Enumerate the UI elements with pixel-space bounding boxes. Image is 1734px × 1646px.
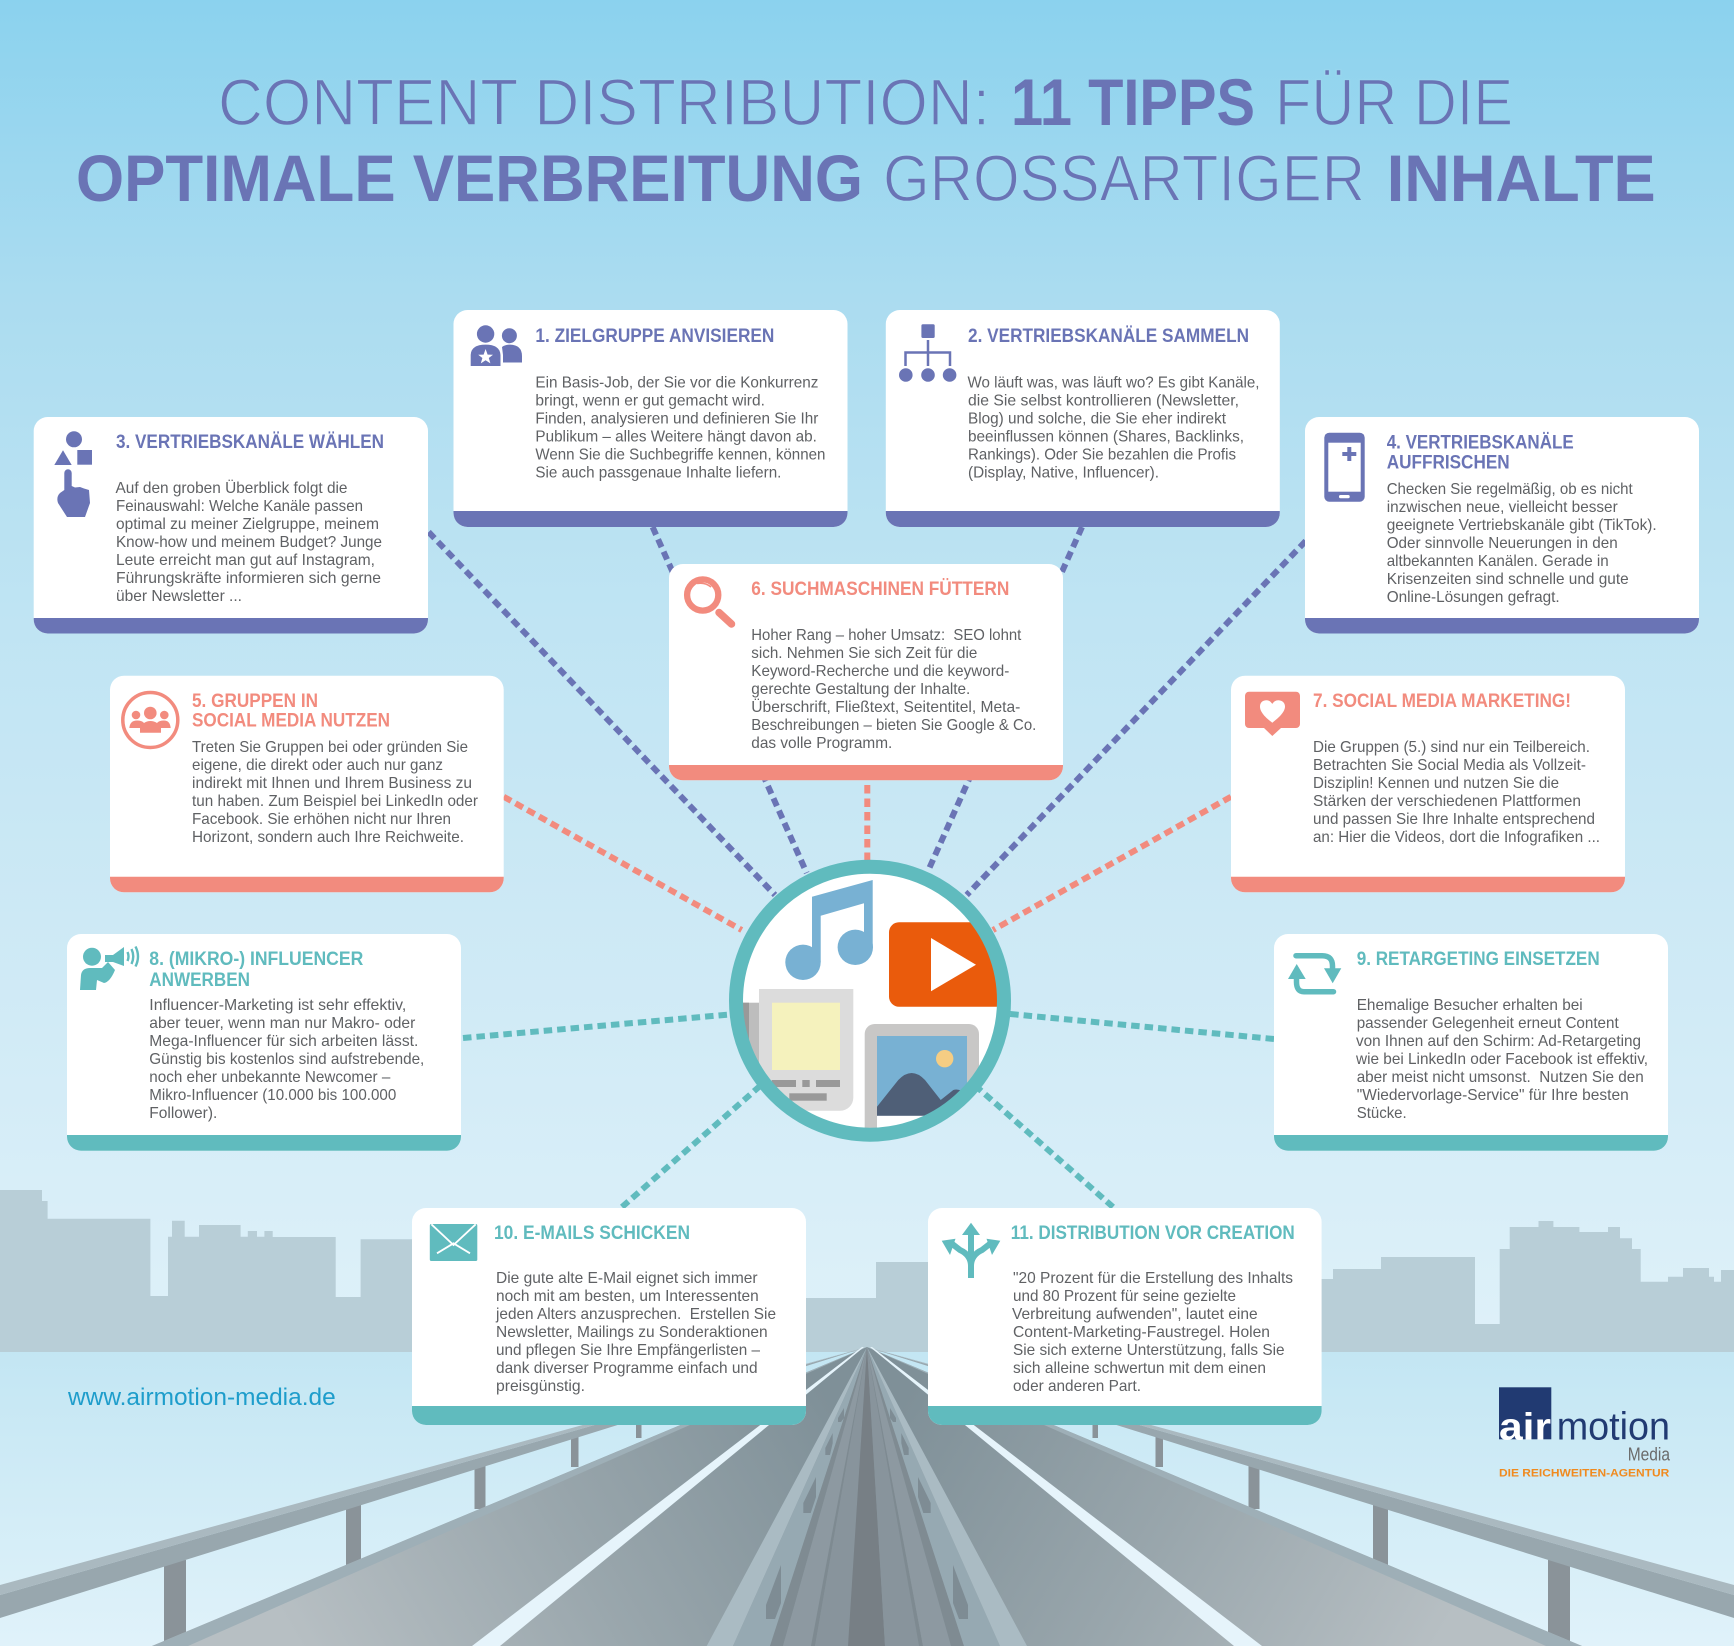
body text: die Sie selbst kontrollieren (Newsletter, [968, 392, 1239, 410]
right guard rail [867, 1347, 1734, 1646]
body text: inzwischen neue, vielleicht besser [1387, 499, 1618, 516]
heading: 8. (MIKRO-) INFLUENCER [149, 949, 364, 970]
body text: "Wiedervorlage-Service" für Ihre besten [1357, 1087, 1629, 1104]
body text: Führungskräfte informieren sich gerne [116, 570, 381, 587]
body text: jeden Alters anzusprechen. Erstellen Sie [495, 1306, 776, 1323]
body text: Disziplin! Kennen und nutzen Sie die [1313, 775, 1559, 792]
panel: tip 11 [928, 1208, 1322, 1425]
body text: Know-how und meinem Budget? Junge [116, 534, 382, 551]
body text: Die Gruppen (5.) sind nur ein Teilbereich. [1313, 739, 1590, 756]
body text: Follower). [149, 1105, 217, 1122]
body text: Facebook. Sie erhöhen nicht nur Ihren [192, 811, 451, 828]
icon: group in circle [123, 692, 178, 748]
body text: Auf den groben Überblick folgt die [116, 479, 348, 497]
icon: video play button [889, 922, 997, 1007]
central barrier [707, 1347, 1027, 1646]
heading: SOCIAL MEDIA NUTZEN [192, 710, 390, 732]
body text [192, 739, 479, 846]
icon: smartphone [1324, 433, 1365, 502]
title: OPTIMALE VERBREITUNG [76, 141, 863, 215]
icon: magnifier [687, 579, 732, 624]
dashed connectors [429, 527, 1306, 1207]
body text: eigene, die direkt oder auch nur ganz [192, 757, 443, 774]
heading: ANWERBEN [149, 970, 250, 991]
body text: Keyword-Recherche und die keyword- [751, 663, 1009, 680]
heading [1387, 432, 1574, 474]
panel: tip 10 [412, 1208, 806, 1425]
body text: Mega-Influencer für sich arbeiten lässt. [149, 1033, 418, 1050]
body text [968, 374, 1260, 482]
title: FÜR DIE [1275, 65, 1513, 139]
body text: Wenn Sie die Suchbegriffe kennen, können [535, 446, 825, 464]
body text: Influencer-Marketing ist sehr effektiv, [149, 997, 406, 1014]
body text: noch mit am besten, um Interessenten [496, 1288, 759, 1305]
body text: Publikum – alles Weitere hängt davon ab. [535, 428, 817, 446]
body text: und 80 Prozent für seine gezielte [1013, 1288, 1236, 1305]
background: water [0, 1352, 1734, 1646]
body text: beeinflussen können (Shares, Backlinks, [968, 428, 1244, 446]
body text: Sie sich externe Unterstützung, falls Sie [1013, 1342, 1285, 1359]
icon: shapes and hand [54, 431, 92, 517]
body text: Blog) und solche, die Sie eher indirekt [968, 410, 1227, 428]
body text: und pflegen Sie Ihre Empfängerlisten – [496, 1342, 760, 1359]
body text: (Display, Native, Influencer). [968, 464, 1159, 482]
body text: sich. Nehmen Sie sich Zeit für die [751, 645, 977, 662]
heading: AUFFRISCHEN [1387, 452, 1510, 474]
icon: three-way arrow [942, 1223, 1000, 1278]
body text [1387, 481, 1657, 606]
panel: tip 4 [1305, 417, 1699, 634]
icon: person with megaphone [80, 946, 138, 990]
body text: noch eher unbekannte Newcomer – [149, 1069, 390, 1086]
icon: envelope [430, 1224, 477, 1261]
body text: Krisenzeiten sind schnelle und gute [1387, 571, 1629, 588]
panel: tip 1 [454, 310, 848, 527]
title: 11 TIPPS [1011, 65, 1255, 139]
body text [1355, 997, 1648, 1122]
body text: sich alleine schwertun mit dem einen [1013, 1360, 1266, 1377]
body text: Ehemalige Besucher erhalten bei [1357, 997, 1583, 1014]
body text: gerechte Gestaltung der Inhalte. [751, 681, 970, 698]
title: GROSSARTIGER [883, 141, 1365, 215]
heading: 2. VERTRIEBSKANÄLE SAMMELN [968, 326, 1249, 347]
body text: preisgünstig. [496, 1378, 585, 1395]
heading [192, 691, 390, 732]
body text: aber meist nicht umsonst. Nutzen Sie den [1357, 1069, 1644, 1086]
body text: Stücke. [1357, 1105, 1407, 1122]
central circle: content types [735, 867, 1019, 1151]
body text: geeignete Vertriebskanäle gibt (TikTok). [1387, 517, 1657, 534]
icon: hierarchy [899, 324, 956, 382]
body text: Finden, analysieren und definieren Sie Ihr [535, 410, 819, 428]
heading: 9. RETARGETING EINSETZEN [1357, 949, 1600, 970]
body text [1012, 1270, 1293, 1395]
body text: indirekt mit Ihnen und Ihrem Business zu [192, 775, 472, 792]
body text: Rankings). Oder Sie bezahlen die Profis [968, 446, 1236, 464]
body text [495, 1270, 776, 1395]
body text: optimal zu meiner Zielgruppe, meinem [116, 516, 379, 533]
body text: Betrachten Sie Social Media als Vollzeit- [1313, 757, 1586, 774]
heading: 1. ZIELGRUPPE ANVISIEREN [535, 326, 774, 347]
body text: Leute erreicht man gut auf Instagram, [116, 552, 375, 569]
road surface [152, 1347, 1582, 1646]
logo: airmotion Media: DIE REICHWEITEN-AGENTUR [1499, 1468, 1669, 1480]
body text: tun haben. Zum Beispiel bei LinkedIn oder [192, 793, 479, 810]
body text: Beschreibungen – bieten Sie Google & Co. [751, 717, 1036, 734]
body text: Stärken der verschiedenen Plattformen [1313, 793, 1581, 810]
left guard rail [0, 1347, 867, 1646]
heading: 11. DISTRIBUTION VOR CREATION [1011, 1223, 1295, 1244]
body text: Online-Lösungen gefragt. [1387, 589, 1560, 606]
background: city skyline [0, 1190, 1734, 1352]
body text: Feinauswahl: Welche Kanäle passen [116, 498, 363, 515]
logo: airmotion Media: Media [1628, 1445, 1671, 1465]
body text: von Ihnen auf den Schirm: Ad-Retargeting [1356, 1033, 1641, 1050]
panel: tip 7 [1231, 676, 1625, 892]
body text [116, 479, 382, 605]
body text: Checken Sie regelmäßig, ob es nicht [1387, 481, 1633, 498]
heading: 4. VERTRIEBSKANÄLE [1387, 432, 1574, 454]
body text: das volle Programm. [751, 735, 892, 752]
body text: Sie auch passgenaue Inhalte liefern. [535, 464, 781, 482]
panel: tip 6 [669, 564, 1063, 780]
body text: Oder sinnvolle Neuerungen in den [1387, 535, 1618, 552]
body text: Ein Basis-Job, der Sie vor die Konkurrenz [535, 374, 818, 392]
logo: airmotion Media [1499, 1387, 1671, 1480]
icon: retarget arrows [1288, 956, 1341, 992]
body text: über Newsletter ... [116, 588, 242, 605]
body text: wie bei LinkedIn oder Facebook ist effektiv, [1355, 1051, 1648, 1068]
logo: airmotion Media: motion [1557, 1405, 1670, 1448]
panel: tip 3 [34, 417, 428, 634]
body text: Content-Marketing-Faustregel. Holen [1013, 1324, 1270, 1341]
body text: Die gute alte E-Mail eignet sich immer [496, 1270, 758, 1287]
body text: Horizont, sondern auch Ihre Reichweite. [192, 829, 464, 846]
body text: Newsletter, Mailings zu Sonderaktionen [496, 1324, 768, 1341]
icon: heart bubble [1245, 692, 1300, 736]
panel: tip 5 [110, 676, 504, 892]
body text: dank diverser Programme einfach und [496, 1360, 758, 1377]
body text: Verbreitung aufwenden", lautet eine [1012, 1306, 1258, 1323]
body text: Mikro-Influencer (10.000 bis 100.000 [149, 1087, 396, 1104]
panel: tip 9 [1274, 934, 1668, 1151]
icon: music note [785, 880, 873, 980]
body text: Günstig bis kostenlos sind aufstrebende, [149, 1051, 424, 1068]
title: INHALTE [1387, 141, 1656, 215]
illustration: highway [0, 1347, 1734, 1646]
title [76, 65, 1656, 215]
body text: an: Hier die Videos, dort die Infografiken ... [1313, 829, 1600, 846]
body text: "20 Prozent für die Erstellung des Inhalts [1013, 1270, 1293, 1287]
panel: tip 8 [67, 934, 461, 1151]
body text: altbekannten Kanälen. Gerade in [1387, 553, 1609, 570]
heading: 5. GRUPPEN IN [192, 691, 318, 712]
heading: 10. E-MAILS SCHICKEN [494, 1223, 690, 1244]
body text [149, 997, 424, 1122]
heading [149, 949, 364, 991]
body text: Wo läuft was, was läuft wo? Es gibt Kanäle, [968, 374, 1260, 392]
heading: 7. SOCIAL MEDIA MARKETING! [1313, 691, 1571, 712]
body text: Treten Sie Gruppen bei oder gründen Sie [192, 739, 468, 756]
body text: passender Gelegenheit erneut Content [1357, 1015, 1619, 1032]
icon: people [471, 325, 522, 366]
heading: 6. SUCHMASCHINEN FÜTTERN [751, 579, 1009, 600]
body text: bringt, wenn er gut gemacht wird. [535, 392, 765, 410]
icon: picture frame [864, 1024, 979, 1128]
body text: Hoher Rang – hoher Umsatz: SEO lohnt [751, 627, 1022, 644]
body text: oder anderen Part. [1013, 1378, 1141, 1395]
body text [535, 374, 825, 482]
title: CONTENT DISTRIBUTION: [218, 65, 990, 139]
heading: 3. VERTRIEBSKANÄLE WÄHLEN [116, 432, 384, 453]
website url: www.airmotion-media.de [67, 1384, 336, 1411]
body text [751, 627, 1036, 752]
body text: aber teuer, wenn man nur Makro- oder [149, 1015, 416, 1032]
logo: airmotion Media: air [1499, 1406, 1551, 1448]
panel: tip 2 [886, 310, 1280, 527]
body text: Überschrift, Fließtext, Seitentitel, Meta- [751, 698, 1020, 716]
body text [1313, 739, 1600, 846]
icon: newspaper [743, 989, 854, 1111]
body text: und passen Sie Ihre Inhalte entsprechend [1313, 811, 1595, 828]
